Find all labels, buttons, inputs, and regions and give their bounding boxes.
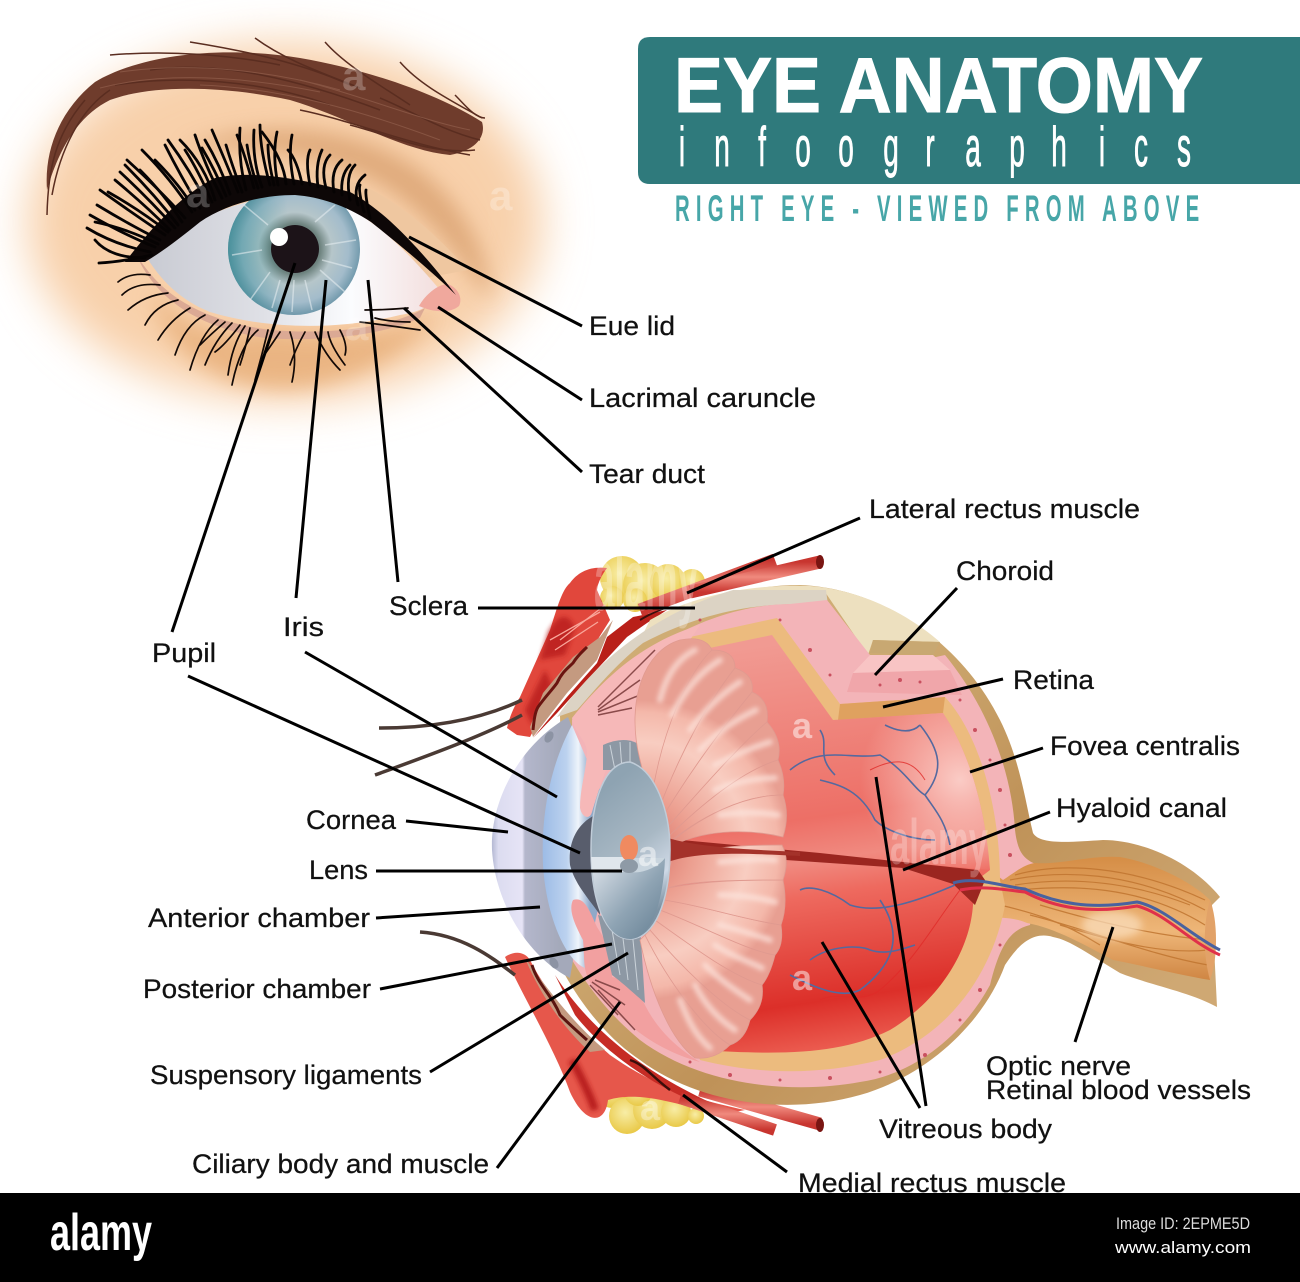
label: Ciliary body and muscle — [192, 1002, 620, 1179]
label: Lacrimal caruncle: Lacrimal caruncle — [589, 383, 816, 413]
label: Optic nerve and Retinal blood vessels: Optic nerve — [986, 1051, 1131, 1081]
upper lashes — [87, 125, 370, 263]
label: Medial rectus muscle — [683, 1095, 1066, 1198]
choroid speckles — [584, 618, 1012, 1082]
watermark: a — [186, 169, 210, 216]
optic nerve — [990, 857, 1216, 980]
label: Suspensory ligaments — [150, 953, 628, 1090]
label: Medial rectus muscle: Medial rectus muscle — [798, 1168, 1066, 1198]
hyaloid canal — [660, 838, 985, 905]
watermark — [594, 530, 988, 1128]
illustration: eye cross-section — [375, 530, 1220, 1134]
subheading: infoographics: infoographics — [679, 117, 1191, 179]
lens nucleus — [620, 835, 638, 861]
watermark: alamy — [890, 806, 988, 878]
choroid notch faces — [847, 655, 962, 695]
label: Iris with leaders — [283, 280, 557, 797]
label: Anterior chamber — [148, 903, 540, 933]
logo: alamy — [50, 1204, 152, 1262]
label: Optic nerve and Retinal blood vessels — [986, 927, 1251, 1105]
label: Pupil with leaders — [152, 263, 580, 853]
label: Eue lid — [409, 237, 675, 341]
dark pupil edge — [570, 815, 600, 915]
label: Tear duct: Tear duct — [589, 459, 706, 489]
skin — [27, 42, 543, 402]
watermark: a — [640, 1087, 661, 1128]
retinal vessels — [790, 725, 955, 993]
watermark: a — [792, 705, 813, 746]
canal wedge — [668, 838, 800, 862]
muscle: bottom — [505, 953, 824, 1132]
cornea notches — [543, 730, 560, 970]
iris section — [543, 725, 600, 968]
watermark: a — [489, 172, 513, 219]
panel: title banner — [638, 37, 1300, 184]
image id: Image ID: 2EPME5D — [1116, 1214, 1250, 1233]
label: Suspensory ligaments: Suspensory ligaments — [150, 1060, 422, 1090]
label: Vitreous body: Vitreous body — [879, 1114, 1053, 1144]
sclera notch: tan face — [870, 640, 940, 655]
upper lash line — [125, 175, 456, 295]
blood vessels in nerve — [953, 881, 1220, 955]
label: Posterior chamber — [143, 944, 612, 1004]
retina band — [650, 618, 1005, 1071]
label: Tear duct — [404, 308, 706, 489]
watermark: a — [792, 957, 813, 998]
lower lid — [135, 252, 425, 339]
choroid — [572, 600, 1040, 1087]
label: Eue lid: Eue lid — [589, 311, 675, 341]
cornea — [492, 717, 573, 978]
label: Cornea: Cornea — [306, 805, 397, 835]
footer bar — [0, 1193, 1300, 1282]
lower lashes — [118, 274, 420, 385]
watermark: a — [638, 833, 659, 874]
fat deposits — [596, 556, 705, 1134]
label: Vitreous body — [822, 777, 1053, 1144]
caruncle — [419, 284, 460, 311]
label: Cornea — [306, 805, 508, 835]
ciliary lobes — [635, 639, 786, 1058]
ciliary muscle strands — [590, 650, 655, 1030]
ciliary pink: bottom — [571, 899, 700, 1062]
label: Retina — [883, 665, 1095, 707]
label: Ciliary body and muscle: Ciliary body and muscle — [192, 1149, 489, 1179]
lens cut — [591, 857, 628, 872]
highlight — [270, 228, 288, 246]
label: Retina: Retina — [1013, 665, 1095, 695]
label: Choroid — [875, 556, 1054, 675]
label: Hyaloid canal — [903, 793, 1227, 870]
inner chamber — [650, 635, 990, 1053]
eyeball — [144, 195, 440, 326]
subtitle: RIGHT EYE - VIEWED FROM ABOVE — [675, 189, 1199, 230]
heading: eye anatomy: EYE ANATOMY — [674, 41, 1203, 129]
muscle tubes — [680, 1098, 775, 1130]
pupil — [271, 225, 319, 273]
muscle: top — [507, 555, 824, 738]
suspensory fibres — [598, 740, 645, 1003]
website: www.alamy.com — [1114, 1238, 1251, 1257]
label: Lens: Lens — [309, 855, 368, 885]
label: Posterior chamber: Posterior chamber — [143, 974, 371, 1004]
label: Sclera with leaders: Sclera — [389, 591, 469, 621]
watermark: a — [342, 52, 366, 99]
label: Fovea centralis — [970, 731, 1240, 772]
label: Hyaloid canal: Hyaloid canal — [1056, 793, 1227, 823]
watermark — [186, 52, 513, 349]
label: Lacrimal caruncle — [438, 307, 816, 413]
ciliary pink: top — [572, 625, 700, 817]
illustration: eye front view — [27, 38, 543, 402]
sclera and optic nerve sheath — [560, 585, 1220, 1105]
lobe highlights — [660, 650, 778, 1048]
label: Fovea centralis: Fovea centralis — [1050, 731, 1240, 761]
label: Anterior chamber: Anterior chamber — [148, 903, 370, 933]
eyelashes: section — [375, 700, 522, 975]
label: Optic nerve and Retinal blood vessels: Retinal blood vessels — [986, 1075, 1251, 1105]
eyebrow — [47, 38, 485, 215]
watermark: alamy — [594, 530, 698, 629]
label: Pupil with leaders: Pupil — [152, 638, 216, 668]
sclera cut: cream — [640, 586, 940, 655]
label: Choroid: Choroid — [956, 556, 1054, 586]
watermark: a — [345, 302, 369, 349]
label: Sclera with leaders — [368, 280, 695, 621]
lens — [591, 762, 670, 939]
iris — [228, 183, 360, 315]
label: Iris with leaders: Iris — [283, 612, 324, 642]
label: Lateral rectus muscle — [687, 494, 1140, 593]
label: Lateral rectus muscle: Lateral rectus muscle — [869, 494, 1140, 524]
muscle tubes — [640, 560, 775, 610]
